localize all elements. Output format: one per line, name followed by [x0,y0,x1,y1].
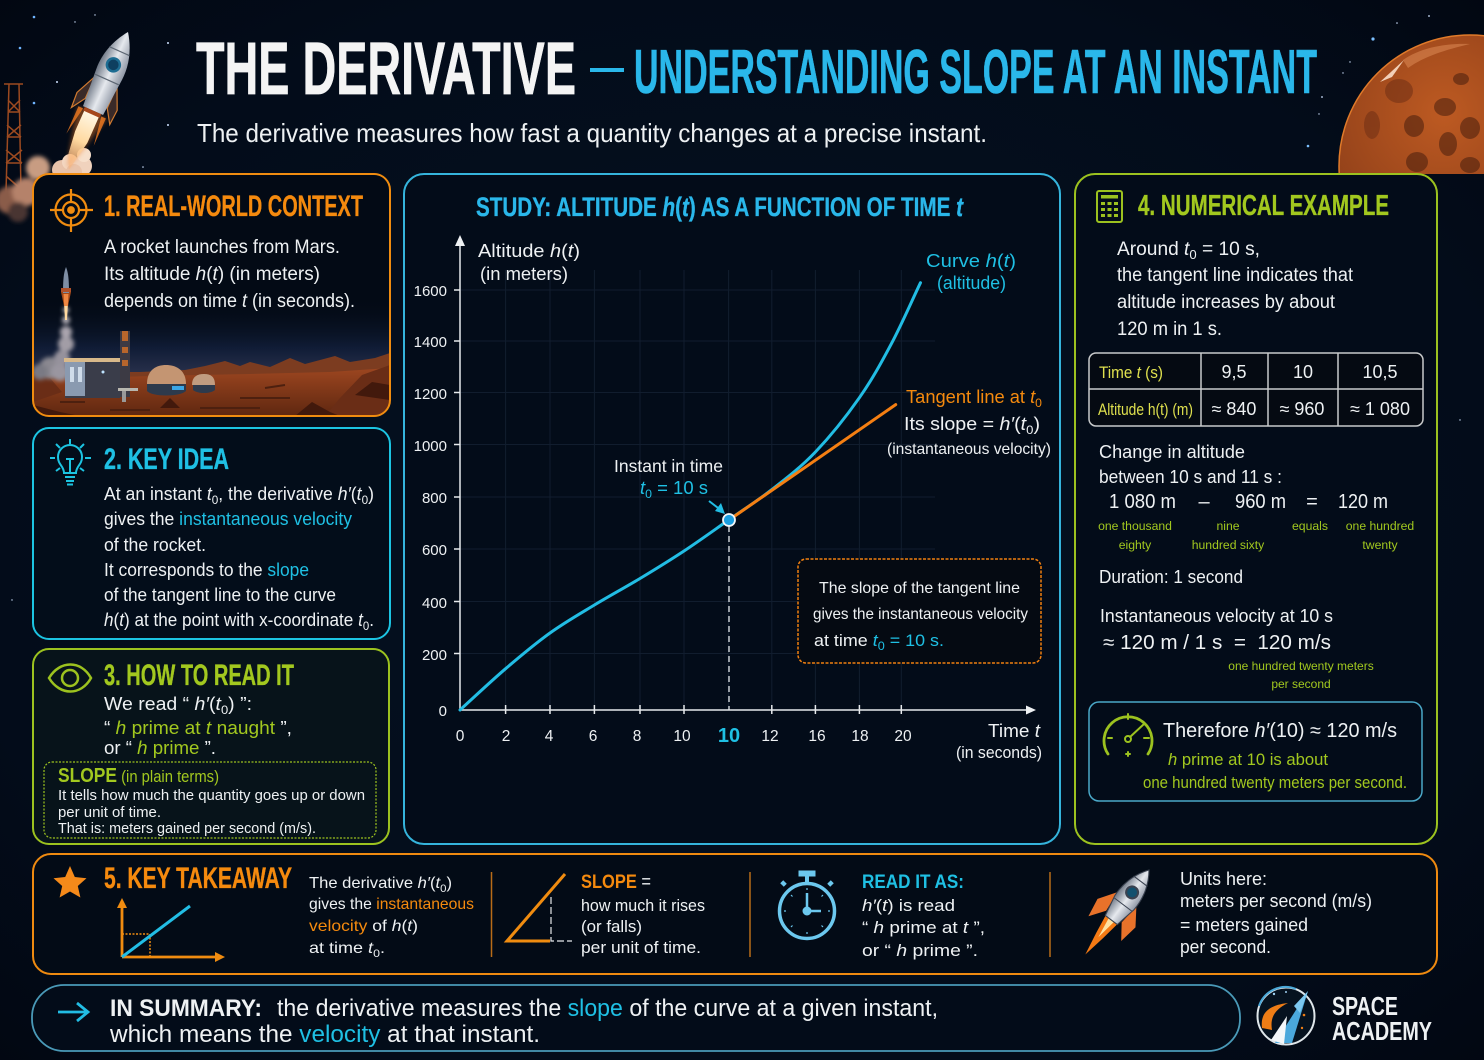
text: instantaneous velocity: one hundred twenty meters [1228,659,1374,673]
label: tangent line [887,387,1051,458]
text: change in altitude: between 10 s and 11 s : [1099,466,1282,487]
label: tangent line: Its slope = h′(t [904,414,1026,434]
y axis with ticks: 1000 [414,438,447,455]
callout: slope in plain terms [44,762,376,838]
illustration: rocket launching [47,23,148,178]
text: number readings: hundred sixty [1192,538,1265,552]
text: reading of h prime: ) ”: [228,694,252,714]
text: context description: A rocket launches from Mars. [104,236,340,258]
panel: 2. key idea [33,428,390,639]
text: summary: the derivative measures the slope of the curve at a given instant, [277,995,938,1022]
text: reading of h prime: “ h prime at t naught ”, [104,718,292,738]
line chart: altitude vs time [414,235,1051,762]
text: reading of h prime: We read “ h′(t [104,694,221,714]
y axis with ticks: 1200 [414,386,447,403]
text: summary: IN SUMMARY: [110,995,262,1022]
x axis with ticks: 18 [851,728,869,745]
text: logo name: SPACE [1332,991,1398,1021]
text: instantaneous velocity [1100,605,1374,691]
text: key idea description: . [369,610,374,630]
text: context description: depends on time t (in seconds). [104,290,355,312]
icon: logo badge [1258,987,1314,1044]
icon: star [54,866,86,898]
text: around t0 [1117,239,1354,340]
equation: altitude difference: – [1198,491,1210,513]
y axis with ticks [414,235,465,720]
title: THE DERIVATIVE [196,27,576,110]
label: instant in time: Instant in time [614,456,723,476]
axis label: time [956,721,1042,762]
x axis with ticks: 16 [808,728,826,745]
icon: stopwatch [780,871,834,938]
axis label: altitude: Altitude h(t) [478,241,580,261]
text: slope definition: SLOPE = [581,872,651,893]
label: tangent line: Tangent line at t [906,387,1035,407]
label: tangent line: (instantaneous velocity) [887,441,1051,458]
callout: slope of tangent: The slope of the tangent line [819,580,1020,597]
icon: light bulb [50,439,91,484]
text: key idea description: ) [368,484,374,504]
text: around t0: = 10 s, [1197,239,1260,260]
icon: target [50,189,93,232]
text: instantaneous velocity: Instantaneous velocity at 10 s [1100,605,1333,626]
panel: 4. numerical example [1075,174,1437,844]
label: instant in time: t [640,478,646,498]
text: number readings: nine [1216,519,1240,533]
text: key idea description: It corresponds to the slope [104,560,309,580]
illustration: Mars base landscape [32,267,390,416]
text: logo name [1332,991,1432,1046]
text: slope definition: (or falls) [581,918,642,936]
text: derivative summary: at time t [309,940,373,957]
text: slope definition: per unit of time. [581,939,701,957]
axis label: altitude [478,241,580,284]
callout: slope in plain terms: SLOPE (in plain terms) [58,765,219,787]
text: read it as: “ h prime at t ”, [862,918,985,937]
text: logo name: ACADEMY [1332,1016,1432,1046]
subtitle: The derivative measures how fast a quantity changes at a precise instant. [197,118,987,148]
icon: eye [49,664,91,692]
callout: slope in plain terms: That is: meters gained per second (m/s). [58,821,316,837]
icon: small tangent graph [117,898,225,962]
axis label: time: Time t [988,721,1041,741]
callout: slope of tangent: = 10 s. [885,631,944,650]
y axis with ticks: 600 [422,542,447,559]
panel: 5. key takeaway [33,854,1437,974]
table: time and altitude: 10,5 [1362,362,1398,382]
icon: speedometer [1104,714,1152,756]
text: units: meters per second (m/s) [1180,891,1372,911]
text: derivative summary: . [380,940,385,957]
curve h(t) [460,283,920,710]
text: units: = meters gained [1180,915,1308,935]
callout: therefore: Therefore h′(10) ≈ 120 m/s [1163,720,1397,742]
text: number readings: one thousand [1098,519,1172,533]
x axis with ticks: 6 [589,728,597,745]
text: key idea description: 0 [362,493,368,507]
x axis with ticks: 12 [761,728,779,745]
table: time and altitude: ≈ 960 [1280,399,1324,419]
heading: key takeaway: 5. KEY TAKEAWAY [104,862,292,895]
text: change in altitude: Change in altitude [1099,441,1245,462]
text: key idea description: h′(t [338,484,362,504]
x axis with ticks: 8 [633,728,641,745]
heading: numerical example: 4. NUMERICAL EXAMPLE [1138,190,1389,222]
text: number readings: twenty [1362,538,1399,552]
equation: altitude difference: = [1306,491,1318,513]
illustration: smoke cloud [0,148,92,222]
equation: altitude difference [1109,491,1388,513]
illustration: planet Mars [1338,34,1484,174]
heading: real-world context: 1. REAL-WORLD CONTEXT [104,190,363,223]
y axis with ticks: 1600 [414,283,447,300]
text: change in altitude [1099,441,1282,487]
text: derivative summary: 0 [440,883,446,895]
label: instant in time: = 10 s [652,478,708,498]
x axis with ticks [456,705,1036,747]
text: derivative summary: ) [446,875,452,892]
text: slope definition [581,872,705,957]
callout: therefore [1089,702,1422,801]
panel: 3. how to read it [33,649,389,844]
icon: calculator [1097,191,1122,222]
text: context description [104,236,355,312]
text: derivative summary: velocity of h(t) [309,918,418,935]
x axis with ticks: 4 [545,728,554,745]
callout: slope in plain terms: per unit of time. [58,805,161,821]
callout: slope of tangent: 0 [878,639,885,653]
text: around t0: altitude increases by about [1117,292,1336,313]
equation: altitude difference: 1 080 m [1109,491,1176,513]
text: instantaneous velocity: per second [1271,677,1331,691]
logo: space academy [1258,987,1432,1046]
x axis with ticks: 10 [673,728,691,745]
text: summary [109,995,938,1048]
text: key idea description: 0 [363,619,370,633]
panel: study chart [404,174,1060,844]
table: time and altitude: 10 [1293,362,1313,382]
label: instant in time [614,456,723,501]
text: units: per second. [1180,937,1271,957]
equation: altitude difference: 960 m [1235,491,1286,513]
label: curve h(t): Curve h(t) [926,251,1016,271]
text: derivative summary: The derivative h′(t [309,875,440,892]
illustration: launch tower [4,84,23,192]
table: time and altitude [1089,353,1423,426]
text: key idea description [104,484,374,633]
panel: in summary [32,985,1240,1051]
heading: key idea: 2. KEY IDEA [104,443,229,476]
heading: study: STUDY: ALTITUDE h(t) AS A FUNCTION OF TIME t [476,192,964,222]
y axis with ticks: 800 [422,490,447,507]
text: units [1180,869,1372,957]
y axis with ticks: 0 [439,703,447,720]
text: number readings: equals [1292,519,1328,533]
text: around t0: Around t [1117,239,1189,260]
x axis with ticks: 10 [718,725,740,747]
text: key idea description: gives the instantaneous velocity [104,509,352,529]
text: summary: which means the velocity at that instant. [109,1021,540,1048]
text: derivative summary: gives the instantaneous [309,896,474,913]
panel: 1. real-world context [32,174,390,416]
x axis with ticks: 0 [456,728,465,745]
table: time and altitude: Time t (s) [1099,363,1163,382]
text: key idea description: , the derivative [218,484,338,504]
text: units: Units here: [1180,869,1267,889]
text: around t0: 120 m in 1 s. [1117,319,1222,340]
y axis with ticks: 400 [422,595,447,612]
text: key idea description: At an instant t [104,484,212,504]
text: key idea description: 0 [212,493,219,507]
text: around t0: 0 [1189,247,1197,262]
point at t0 [723,514,735,526]
icon: arrow [58,1003,88,1021]
axis label: altitude: (in meters) [480,264,568,284]
title [196,27,1317,110]
callout: slope of tangent [798,559,1041,663]
icon: rocket [1066,856,1168,969]
text: context description: Its altitude h(t) (in meters) [104,263,320,285]
table: time and altitude: ≈ 1 080 [1350,399,1410,419]
y axis with ticks: 1400 [414,334,447,351]
text: around t0: the tangent line indicates that [1117,265,1354,286]
table: time and altitude: Altitude h(t) (m) [1098,400,1193,419]
callout: slope in plain terms: It tells how much the quantity goes up or down [58,788,365,804]
text: read it as: or “ h prime ”. [862,941,978,960]
callout: therefore: h prime at 10 is about [1168,750,1328,769]
text: duration: Duration: 1 second [1099,566,1243,587]
text: number readings: one hundred [1346,519,1414,533]
arrow to point [709,501,725,514]
text: number readings [1098,519,1414,552]
text: read it as [862,872,985,960]
label: curve h(t) [926,251,1016,293]
label: tangent line: 0 [1035,396,1042,410]
label: instant in time: 0 [645,487,652,501]
table: time and altitude: 9,5 [1221,362,1247,382]
text: instantaneous velocity: ≈ 120 m / 1 s = 120 m/s [1103,632,1331,654]
text: reading of h prime: 0 [221,703,229,717]
x axis with ticks: 20 [894,728,912,745]
label: tangent line: ) [1033,414,1040,434]
icon: slope triangle [507,874,572,941]
text: slope definition: how much it rises [581,897,705,915]
heading: how to read it: 3. HOW TO READ IT [104,659,294,692]
x axis with ticks: 2 [502,728,510,745]
text: key idea description: of the tangent line to the curve [104,585,336,605]
text: derivative summary [309,875,474,960]
callout: therefore: one hundred twenty meters per second. [1143,773,1407,792]
text: key idea description: h(t) at the point with x-coordinate t [104,610,365,630]
text: key idea description: of the rocket. [104,535,206,555]
text: reading of h prime: or “ h prime ”. [104,738,216,758]
text: read it as: READ IT AS: [862,872,964,893]
label: tangent line: 0 [1026,423,1034,437]
text: read it as: h′(t) is read [862,896,955,915]
label: curve h(t): (altitude) [937,273,1006,293]
table: time and altitude: ≈ 840 [1212,399,1256,419]
y axis with ticks: 200 [422,647,447,664]
axis label: time: (in seconds) [956,744,1042,762]
text: reading of h prime [104,694,292,758]
tangent line [729,405,896,520]
callout: slope of tangent: at time t [814,631,877,650]
text: number readings: eighty [1119,538,1152,552]
text: derivative summary: 0 [373,948,380,960]
equation: altitude difference: 120 m [1338,491,1388,513]
callout: slope of tangent: gives the instantaneous velocity [813,606,1028,623]
